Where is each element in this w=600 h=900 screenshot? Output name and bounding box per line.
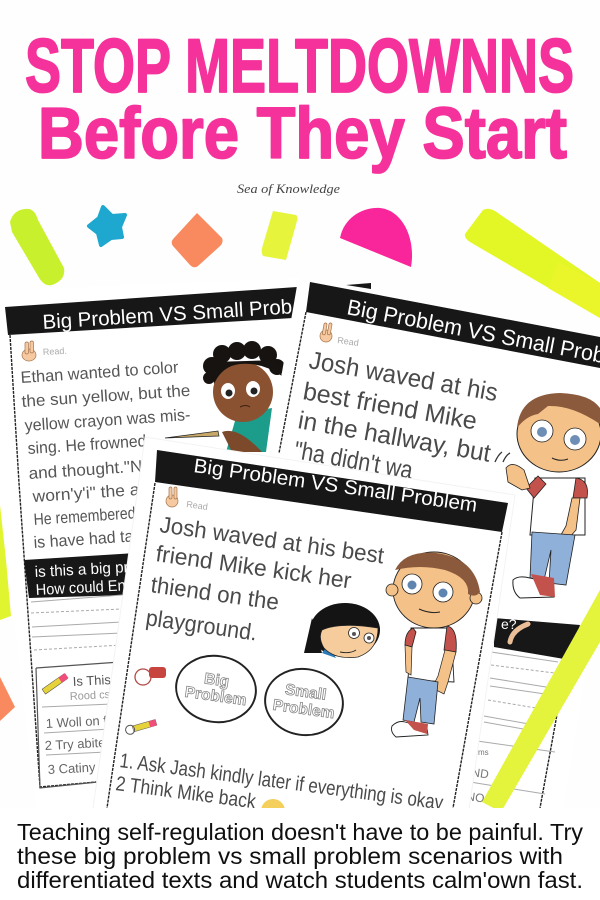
question band <box>24 553 135 598</box>
story text: best friend Mike <box>301 377 479 435</box>
character: waving boy <box>495 393 600 598</box>
icon: orange diamond eraser <box>172 213 223 267</box>
question text and icon <box>501 616 528 642</box>
worksheet border <box>107 483 502 808</box>
story text: He remembered <box>33 504 136 529</box>
title <box>25 24 574 174</box>
icon: green eraser stick <box>10 209 64 285</box>
story text: in the hallway, but <box>296 406 493 468</box>
answer box: 3 Catiny t <box>47 759 103 777</box>
panel: back left worksheet <box>0 278 300 810</box>
answer options: 1. Ask Jash kindly later if everything is okay <box>118 749 445 815</box>
character: standing boy <box>386 552 482 737</box>
option: big problem <box>172 651 260 727</box>
story text: yellow crayon was mis- <box>24 406 191 435</box>
story text: Ethan wanted to color <box>20 359 179 387</box>
story text: playground. <box>144 604 259 646</box>
icon: pink half circle eraser <box>340 208 412 267</box>
icon: yellow cylinder eraser <box>262 211 297 260</box>
question text: How could En <box>35 577 126 599</box>
story text: is have had ta <box>33 527 135 552</box>
header text: Big Problem VS Small Problem <box>192 455 479 517</box>
question text <box>34 559 129 599</box>
icon: hand <box>166 487 178 507</box>
panel: back right worksheet <box>230 280 600 830</box>
caption text: these big problem vs small problem scenarios with <box>17 843 563 869</box>
answer labels <box>466 748 490 805</box>
character: girl head <box>304 603 380 658</box>
story text: worn'y'i" the a <box>31 481 141 506</box>
writing lines <box>31 595 122 650</box>
answer labels: NO <box>466 789 485 805</box>
caption text: differentiated texts and watch students calm'own fast. <box>17 867 583 893</box>
small black corner mark <box>346 283 371 289</box>
story text: friend Mike kick her <box>154 540 353 593</box>
answer box: 1 Woll on fric <box>45 712 121 731</box>
icon: blue star eraser <box>89 207 125 245</box>
answer box <box>36 662 123 788</box>
option: small problem: Problem <box>272 697 336 722</box>
answer options: 2 Think Mike back <box>114 772 258 813</box>
icon: crayon <box>42 673 68 694</box>
option: small problem: Small <box>284 681 327 704</box>
read label: Read <box>186 499 208 512</box>
answer box: 2 Try abite <box>44 735 106 753</box>
writing lines <box>470 652 558 794</box>
header bar <box>306 282 600 368</box>
story text: thiend on the <box>149 571 281 615</box>
icon: yellow highlighter left edge <box>0 505 11 620</box>
question text and icon: e? <box>501 616 517 632</box>
story text: and thought."N <box>28 457 143 483</box>
answer labels: ms <box>478 748 489 757</box>
read label: Read. <box>43 346 67 357</box>
story text <box>144 511 386 646</box>
header text: Big Problem VS Small Prob <box>42 295 293 334</box>
icon: hand <box>22 341 36 361</box>
icon: crayon <box>125 718 157 735</box>
story text: Josh waved at his <box>307 346 500 407</box>
story text <box>292 346 500 485</box>
worksheet border <box>10 335 96 787</box>
panel: front worksheet <box>90 437 515 830</box>
option: big problem: Big <box>203 670 230 691</box>
character: boy with curly hair <box>165 341 285 452</box>
caption band <box>0 808 600 900</box>
answer labels: ND <box>471 765 490 781</box>
story text: sing. He frowned <box>27 432 147 458</box>
option: small problem <box>261 664 347 740</box>
header bar <box>155 450 508 532</box>
icon: smiley <box>261 799 285 823</box>
story text: Josh waved at his best <box>158 511 386 568</box>
story text <box>20 359 191 552</box>
icon: apple and bag <box>135 667 166 685</box>
header bar <box>5 287 297 335</box>
story text: the sun yellow, but the <box>21 382 191 411</box>
icon: hand <box>320 323 332 342</box>
read label: Read <box>337 335 359 348</box>
question text: is this a big pr <box>34 559 129 581</box>
icon: yellow highlighter top right <box>465 209 600 318</box>
answer box: Is This a <box>72 671 123 689</box>
story text: "ha didn't wa <box>292 436 415 485</box>
option: big problem: Problem <box>184 684 248 709</box>
icon: orange eraser left edge <box>0 677 15 721</box>
caption text: Teaching self-regulation doesn't have to be painful. Try <box>17 819 583 845</box>
worksheet border <box>279 312 566 808</box>
icon: yellow highlighter bottom right <box>482 590 600 812</box>
logo: Sea of Knowledge: Sea of Knowledge <box>237 181 340 196</box>
caption text <box>17 819 583 893</box>
question band <box>494 618 580 660</box>
answer box: Rood csn <box>70 689 117 703</box>
